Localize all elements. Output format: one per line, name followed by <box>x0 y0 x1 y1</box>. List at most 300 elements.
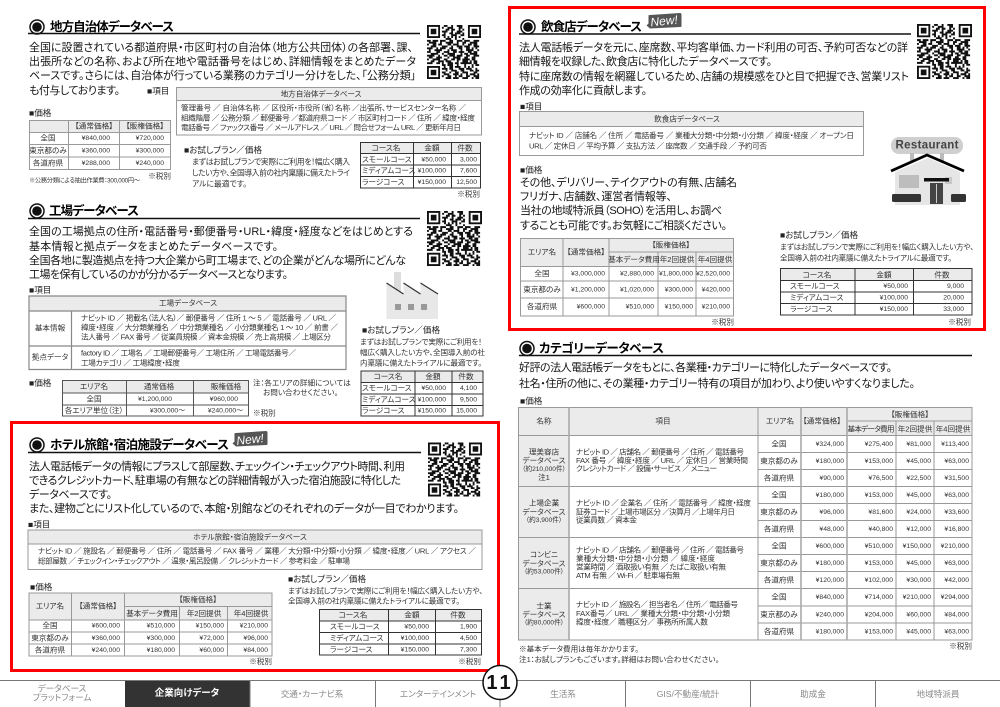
row: 上場企業: ¥45,000 <box>906 492 931 498</box>
tab labels: GIS/不動産/統計 <box>657 688 720 699</box>
price table: ¥360,000 <box>82 147 110 154</box>
price table: 【通常価格】 <box>567 246 605 256</box>
table header <box>536 409 971 434</box>
row: 理美容店: FAX 番号 ／ 緯度・経度 ／ URL ／ 定休日 ／ 営業時間 <box>576 455 748 465</box>
items table: 組織階層 ／ 公務分類 ／ 郵便番号 ／都道府県コード ／ 市区町村コード ／ 住所 ／ 緯度・経度 <box>181 112 475 122</box>
tax note: ※税別 <box>711 316 734 326</box>
course table: ¥50,000 <box>883 282 908 290</box>
panel: 地方自治体データベース <box>28 19 482 198</box>
additional info text <box>520 175 737 232</box>
extraction fee note: ※公務分類による抽出作業費：300,000円～ <box>29 176 140 184</box>
description text: 法人電話帳データを元に、座席数、平均客単価、カード利用の可否、予約可否などの詳 <box>519 40 908 54</box>
price table: 通常価格 <box>144 381 175 391</box>
course table: 件数 <box>458 371 474 381</box>
course table: コース名 <box>803 270 831 280</box>
tab labels: プラットフォーム <box>33 692 92 702</box>
row: 上場企業: ¥81,600 <box>868 508 893 516</box>
items table: 工場データベース <box>159 298 217 308</box>
description text: 特に座席数の情報を網羅しているため、店舗の規模感をひと目で把握でき、営業リスト <box>519 69 909 83</box>
price table: ¥210,000 <box>702 303 730 310</box>
items label: ■項目 <box>29 285 51 295</box>
course table: 20,000 <box>943 294 964 301</box>
row: 士業: 緯度・経度／ 職種区分／ 事務所所属人数 <box>576 616 708 626</box>
row: コンビニ: ¥210,000 <box>941 542 969 550</box>
description text: 法人電話帳データの情報にプラスして部屋数、チェックイン・チェックアウト時間、利用 <box>29 459 405 473</box>
icon: restaurant: Restaurant <box>896 140 959 152</box>
description text: 社名・住所の他に、その業種・カテゴリー特有の項目が加わり、より使いやすくなりました。 <box>519 376 915 390</box>
table header: 【販権価格】 <box>891 409 929 419</box>
area note: お問い合わせください。 <box>263 387 338 397</box>
price table: 【販権価格】 <box>126 120 164 130</box>
tab labels: 地域特派員 <box>917 688 960 699</box>
row: 士業: 全国 <box>771 592 787 602</box>
price table: ¥420,000 <box>702 286 730 293</box>
items table <box>520 112 864 156</box>
price table: ¥510,000 <box>147 622 175 629</box>
course table: 件数 <box>934 270 950 280</box>
price table: 販権価格 <box>211 381 242 391</box>
price table: ¥2,880,000 <box>620 270 654 277</box>
trial plan text: 全国導入前の社内稟議に備えたトライアルに最適です。 <box>780 252 952 262</box>
course table: ¥100,000 <box>418 396 446 403</box>
table header: 基本データ費用 <box>848 424 894 434</box>
row: 上場企業: ¥153,000 <box>865 492 893 498</box>
row: 士業: ¥180,000 <box>816 628 844 635</box>
heading: 飲食店 <box>519 19 911 34</box>
panel: ホテル旅館・宿泊施設データベース (highlighted) <box>12 422 498 670</box>
items table: ナビット ID ／ 店舗名 ／ 住所 ／ 電話番号 ／ 業種大分類・中分類・小分類 ／ 緯度・経度 ／ オープン日 <box>529 130 854 140</box>
table header: 年2回提供 <box>898 424 933 434</box>
price table: ¥600,000 <box>92 622 120 629</box>
description text: 細情報を収録した、飲食店に特化したデータベースです。 <box>519 54 772 68</box>
price table: エリア名 <box>36 600 64 610</box>
course table <box>780 268 972 315</box>
trial plan text: したい方や、全国導入前の社内稟議に備えたトライ <box>192 168 350 178</box>
tab labels: 助成金 <box>800 688 826 699</box>
course table: 7,600 <box>460 167 477 174</box>
price table: ¥3,000,000 <box>571 270 605 277</box>
course table: コース名 <box>374 371 402 381</box>
price table: ¥2,520,000 <box>696 270 730 277</box>
table header: 【通常価格】 <box>803 416 841 426</box>
row: 理美容店: ¥113,400 <box>941 440 969 448</box>
price table: ¥600,000 <box>577 303 605 310</box>
heading: 地方自治体 <box>28 19 420 34</box>
row: 理美容店: 東京都のみ <box>760 456 798 466</box>
row: 士業: ¥153,000 <box>865 628 893 635</box>
row: コンビニ: ¥510,000 <box>865 542 893 550</box>
price table: 全国 <box>534 268 550 278</box>
description text: も付与しております。 <box>29 84 120 97</box>
price table <box>29 593 272 656</box>
description text: 全国各地に製造拠点を持つ大企業から町工場まで、どの企業がどんな場所にどんな <box>29 253 406 267</box>
row: 士業: ¥240,000 <box>816 611 844 618</box>
table header: 年4回提供 <box>936 424 971 434</box>
course table: 3,000 <box>460 156 477 163</box>
price table <box>520 238 734 316</box>
price table: 全国 <box>40 132 56 142</box>
additional info text: することも可能です。お気軽にご相談ください。 <box>520 218 727 232</box>
items table: 管理番号 ／ 自治体名称 ／ 区役所・市役所（省）名称 ／出張所、サービスセンター名称 ／ <box>181 102 466 112</box>
tab labels: エンターテインメント <box>400 689 476 699</box>
price table: ¥1,020,000 <box>620 286 654 293</box>
price table: 年2回提供 <box>660 254 695 264</box>
area note: 注：各エリアの詳細については <box>253 378 351 388</box>
additional info text: 当社の地域特派員（SOHO）を活用し、お調べ <box>520 203 722 217</box>
row: 理美容店: ¥76,500 <box>868 474 893 482</box>
row: コンビニ: 業種大分類・中分類・小分類 ／ 緯度・経度 <box>576 553 715 563</box>
tax note: ※税別 <box>457 188 480 198</box>
price table: エリア名 <box>80 381 108 391</box>
course table: ミディアムコース <box>790 292 844 302</box>
row: 士業: ¥60,000 <box>906 611 931 618</box>
course table: ラージコース <box>330 645 372 654</box>
row: 上場企業: ¥33,600 <box>944 508 969 516</box>
price table: ¥210,000 <box>240 622 268 629</box>
additional info text: その他、デリバリー、テイクアウトの有無、店舗名 <box>520 175 737 189</box>
price table: 東京都のみ <box>523 284 561 294</box>
price table: ¥180,000 <box>147 646 175 654</box>
trial plan text: ■お試しプラン／価格 <box>362 324 440 335</box>
course table: ラージコース <box>362 178 404 186</box>
price table: ¥96,000 <box>243 634 268 642</box>
price table: エリア名 <box>528 246 556 256</box>
heading: カテゴリー <box>519 340 972 356</box>
tax note: ※税別 <box>949 640 972 650</box>
panel: カテゴリーデータベース <box>518 340 972 664</box>
items table: 法人番号 ／ FAX 番号 ／ 従業員規模 ／ 資本金規模 ／ 売上高規模 ／ 上場区分 <box>81 332 331 342</box>
course table <box>360 142 480 188</box>
tab labels: データベース <box>37 682 86 694</box>
items table: 地方自治体データベース <box>281 88 361 98</box>
course table: 12,500 <box>456 178 477 186</box>
trial plan text: 内稟議に備えたトライアルに最適です。 <box>360 358 482 368</box>
QR code <box>427 25 481 79</box>
QR code <box>917 24 972 79</box>
price table: 各道府県 <box>527 301 558 311</box>
course table: 1,900 <box>460 623 477 630</box>
row: 士業: ¥210,000 <box>903 594 931 600</box>
row: 理美容店: ¥45,000 <box>906 458 931 464</box>
row: コンビニ: ¥102,000 <box>865 576 893 584</box>
row: 上場企業: （約3,900件） <box>526 515 562 524</box>
course table: ¥100,000 <box>418 167 446 174</box>
course table: コース名 <box>372 142 400 152</box>
tab labels: 交通・カーナビ系 <box>281 689 344 699</box>
price table: ¥510,000 <box>626 303 654 310</box>
items table: 基本情報 <box>35 322 66 332</box>
red frame <box>12 422 498 670</box>
description text <box>29 459 459 515</box>
row: 理美容店: ¥324,000 <box>816 440 844 448</box>
heading: 飲食店: 飲食店データベース <box>541 19 642 34</box>
trial plan text <box>360 324 485 368</box>
course table: 件数 <box>457 142 473 152</box>
row: コンビニ: （約53,000件） <box>524 566 564 576</box>
row: 理美容店: ¥63,000 <box>944 458 969 464</box>
row: 理美容店: ¥31,500 <box>944 474 969 482</box>
course table: 金額 <box>404 610 420 620</box>
row: 上場企業: ¥40,800 <box>868 526 893 532</box>
heading: 地方自治体: 地方自治体データベース <box>50 19 174 34</box>
row: コンビニ: ナビット ID ／ 店舗名 ／ 郵便番号 ／ 住所 ／ 電話番号 <box>576 544 744 554</box>
price table: ¥84,000 <box>243 646 268 654</box>
trial plan text <box>288 573 483 606</box>
course table: スモールコース <box>330 622 380 631</box>
course table: ¥100,000 <box>880 294 908 301</box>
trial plan text: アルに最適です。 <box>192 178 247 188</box>
badge: New!: New! <box>650 13 679 29</box>
tax note: ※税別 <box>948 316 971 326</box>
course table: ミディアムコース <box>362 394 416 404</box>
price table: 全国 <box>86 394 102 404</box>
tax note: ※税別 <box>458 656 481 666</box>
price table: 各エリア単位（注） <box>65 405 123 415</box>
icon: factory <box>386 272 438 319</box>
area note <box>253 378 351 397</box>
row: 理美容店: ¥180,000 <box>816 458 844 464</box>
price label: ■価格 <box>520 395 543 406</box>
row: 士業: ¥45,000 <box>906 628 931 635</box>
row: 上場企業 <box>522 490 969 534</box>
row: 士業 <box>522 592 969 636</box>
items table <box>28 530 482 570</box>
course table: ミディアムコース <box>362 165 416 175</box>
heading: カテゴリー: カテゴリーデータベース <box>539 340 664 356</box>
price table: 東京都のみ <box>31 632 69 642</box>
active tab <box>125 680 250 707</box>
items label: ■項目 <box>28 520 50 530</box>
row: 士業: 東京都のみ <box>760 609 798 619</box>
panel: 飲食店データベース (highlighted) <box>510 8 984 330</box>
row: コンビニ: 各道府県 <box>764 574 795 584</box>
description text: 作成の効率化に貢献します。 <box>519 84 647 97</box>
footnotes: 注1：お試しプランもございます。詳細はお問い合わせください。 <box>519 654 719 664</box>
course table: 4,500 <box>460 634 477 642</box>
items table: 緯度・経度 ／ 大分類業種名 ／ 中分類業種名 ／ 小分類業種名 1 ～ 10 ／ 前書 ／ <box>81 322 338 332</box>
items table: ホテル旅館・宿泊施設データベース <box>193 532 307 542</box>
trial plan text: 幅広く購入したい方や、全国導入前の社 <box>360 347 485 357</box>
course table: ¥150,000 <box>401 646 429 653</box>
row: コンビニ: ¥45,000 <box>906 560 931 566</box>
row: コンビニ: 東京都のみ <box>760 558 798 568</box>
footnotes <box>519 644 719 664</box>
course table: 7,300 <box>460 646 477 653</box>
row: コンビニ <box>522 540 969 584</box>
tax note: ※税別 <box>249 656 272 666</box>
row: 士業: ¥840,000 <box>816 594 844 600</box>
price table: 【販権価格】 <box>179 594 217 604</box>
course table: スモールコース <box>362 155 412 164</box>
row: 上場企業: ¥180,000 <box>816 492 844 498</box>
row: コンビニ: ¥30,000 <box>906 576 931 584</box>
row: 士業: ナビット ID ／ 施設名／ 担当者名／ 住所／ 電話番号 <box>576 599 738 609</box>
row: 理美容店: データベース <box>522 455 565 465</box>
row: 士業: ¥204,000 <box>865 611 893 618</box>
trial plan text <box>184 144 350 188</box>
items table: 総部屋数 ／ チェックイン・チェックアウト ／ 温泉・風呂設備 ／ クレジットカード ／ 参考料金 ／ 駐車場 <box>38 556 350 566</box>
row: 士業: FAX番号／ URL ／ 業種大分類・中分類・小分類 <box>576 608 730 618</box>
row: 上場企業: ¥16,800 <box>944 526 969 532</box>
course table: 9,000 <box>947 282 964 290</box>
heading: 工場: 工場データベース <box>49 203 139 218</box>
price table: ¥300,000～ <box>150 407 185 414</box>
page number: 11 <box>486 672 514 694</box>
description text: データベースです。 <box>29 487 112 501</box>
items table: factory ID ／ 工場名 ／ 工場郵便番号／ 工場住所 ／ 工場電話番号／ <box>81 348 296 358</box>
price label: ■価格 <box>29 377 52 388</box>
course table: 件数 <box>450 610 466 620</box>
row: 上場企業: ナビット ID ／ 企業名 ／ 住所 ／ 電話番号 ／ 緯度・経度 <box>576 498 751 508</box>
price table: ¥1,800,000 <box>659 270 693 277</box>
price table: ¥300,000 <box>147 634 175 642</box>
course table: 金額 <box>424 142 440 152</box>
course table: 9,500 <box>460 396 477 403</box>
row: コンビニ: ¥120,000 <box>816 576 844 584</box>
row: コンビニ: コンビニ <box>530 550 558 559</box>
course table <box>361 371 483 416</box>
course table: ¥50,000 <box>404 623 429 630</box>
row: 上場企業: 全国 <box>771 490 787 500</box>
row: 理美容店: クレジットカード ／ 設備・サービス ／ メニュー <box>576 463 717 473</box>
price table: ¥60,000 <box>199 646 224 654</box>
price table: 【通常価格】 <box>79 600 117 610</box>
description text: できるクレジットカード、駐車場の有無などの詳細情報が入った宿泊施設に特化した <box>29 473 401 487</box>
heading: ホテル旅館: ホテル旅館・宿泊施設データベース <box>50 437 229 452</box>
course table: ミディアムコース <box>330 632 384 642</box>
course table: ラージコース <box>362 406 404 415</box>
description text <box>519 360 915 390</box>
row: 理美容店: ¥22,500 <box>906 474 931 482</box>
course table: 4,100 <box>460 384 477 392</box>
price table: ¥960,000 <box>210 396 238 402</box>
description text: 工場を保有しているのかが分かるデータベースとなります。 <box>29 267 288 281</box>
price table: ¥72,000 <box>199 634 224 642</box>
description text: 全国に設置されている都道府県・市区町村の自治体（地方公共団体）の各部署、課、 <box>29 40 413 54</box>
row: 上場企業: 上場企業 <box>529 498 560 508</box>
row: 理美容店: 理美容店 <box>529 446 560 456</box>
items table: 飲食店データベース <box>654 114 720 124</box>
course table: ¥50,000 <box>421 156 446 163</box>
course table: コース名 <box>339 610 367 620</box>
price table: ¥840,000 <box>82 134 110 142</box>
row: 理美容店: ¥81,000 <box>906 440 931 448</box>
trial plan text <box>780 229 974 262</box>
price table: 基本データ費用 <box>126 608 178 618</box>
heading: 工場 <box>28 203 420 218</box>
description text: 出張所などの名称、および所在地や電話番号をはじめ、詳細情報をまとめたデータ <box>29 54 416 68</box>
row: 士業: ¥714,000 <box>865 594 893 600</box>
price table: 東京都のみ <box>29 145 67 155</box>
items table: 電話番号 ／ ファックス番号 ／ メールアドレス ／ URL ／ 問合せフォーム URL ／ 更新年月日 <box>181 122 461 132</box>
price table: ¥150,000 <box>665 303 693 310</box>
row: コンビニ: 全国 <box>771 540 787 550</box>
price table: ¥288,000 <box>82 160 110 166</box>
items table: 拠点データ <box>32 352 68 362</box>
row: 士業: データベース <box>522 609 565 619</box>
description text: ベースです。さらには、自治体が行っている業務のカテゴリー分けをした、「公務分類」 <box>29 68 416 82</box>
row: 上場企業: データベース <box>522 506 565 516</box>
additional info text: フリガナ、店舗数、運営者情報等、 <box>520 189 672 203</box>
description text: また、建物ごとにリスト化しているので、本館・別館などのそれぞれのデータが一目でわかります。 <box>29 501 459 515</box>
row: 上場企業: ¥12,000 <box>906 526 931 532</box>
course table: ラージコース <box>790 304 832 314</box>
trial plan text: ■お試しプラン／価格 <box>288 573 366 584</box>
row: 理美容店: （約210,000件） <box>522 464 566 473</box>
trial plan text: まずはお試しプランで実際にご利用を！幅広く購入 <box>192 156 350 166</box>
row: 上場企業: 各道府県 <box>764 524 795 534</box>
price table <box>29 120 170 170</box>
row: 士業: ¥294,000 <box>941 594 969 600</box>
row: 上場企業: 東京都のみ <box>760 506 798 516</box>
price table: ¥1,200,000 <box>571 286 605 293</box>
row: 理美容店: 注1 <box>538 472 550 482</box>
row: 理美容店: 各道府県 <box>764 472 795 482</box>
items table <box>29 296 346 370</box>
price label: ■価格 <box>520 164 543 175</box>
category price table <box>518 408 972 640</box>
course table: 33,000 <box>943 306 964 312</box>
course table: スモールコース <box>790 282 840 290</box>
price table: ¥300,000 <box>665 286 693 293</box>
row: 理美容店: ¥153,000 <box>865 458 893 464</box>
course table: ¥150,000 <box>418 178 446 186</box>
page number <box>483 666 517 700</box>
items table: ナビット ID ／ 施設名 ／ 郵便番号 ／ 住所 ／ 電話番号 ／ FAX 番号 ／ 業種／ 大分類・中分類・小分類 ／ 緯度・経度／ URL ／ アクセス ／ <box>38 546 476 556</box>
row: コンビニ: ¥63,000 <box>944 560 969 566</box>
tax note: ※税別 <box>253 408 276 418</box>
heading: ホテル旅館 <box>28 437 421 452</box>
row: コンビニ: ¥600,000 <box>816 542 844 550</box>
trial plan text: ■お試しプラン／価格 <box>780 229 858 240</box>
row: コンビニ: ¥180,000 <box>816 560 844 566</box>
row: 上場企業: 従業員数 ／ 資本金 <box>576 514 637 524</box>
course table: 金額 <box>425 371 441 381</box>
table header: 名称 <box>536 416 552 426</box>
price label: ■価格 <box>29 107 52 118</box>
price table <box>62 380 248 416</box>
row: 理美容店: 全国 <box>771 438 787 448</box>
trial plan text: まずはお試しプランで実際にご利用を！幅広く購入したい方や、 <box>288 586 483 596</box>
price table: ¥300,000 <box>136 147 164 154</box>
panel: 工場データベース <box>28 203 485 418</box>
course table: ¥150,000 <box>418 407 446 414</box>
row: 理美容店: ¥275,400 <box>865 440 893 448</box>
tax note: ※税別 <box>148 170 171 180</box>
items table: URL ／ 定休日 ／ 平均予算 ／ 支払方法 ／ 座席数 ／ 交通手段 ／ 予約可否 <box>529 140 767 150</box>
row: 士業: 士業 <box>536 600 552 610</box>
price label: ■価格 <box>30 581 53 592</box>
items table: 工場カテゴリ ／ 工場緯度・経度 <box>81 358 180 368</box>
row: 上場企業: ¥48,000 <box>819 526 844 532</box>
course table: 金額 <box>876 270 892 280</box>
row: 上場企業: ¥63,000 <box>944 492 969 498</box>
description text: 好評の法人電話帳データをもとに、各業種・カテゴリーに特化したデータベースです。 <box>519 360 892 374</box>
price table: 全国 <box>42 620 58 630</box>
trial plan text: まずはお試しプランで実際にご利用を！ <box>360 336 482 346</box>
table header: 項目 <box>655 416 671 426</box>
row: 士業: ¥84,000 <box>944 611 969 618</box>
row: 士業: （約80,000件） <box>524 618 564 626</box>
course table: ¥150,000 <box>880 306 908 312</box>
price table: 年4回提供 <box>234 608 269 618</box>
description text: 基本情報と拠点データをまとめたデータベースです。 <box>29 239 278 253</box>
description text <box>29 40 416 97</box>
table header: エリア名 <box>766 416 794 426</box>
description text: 全国の工場拠点の住所・電話番号・郵便番号・URL・緯度・経度などをはじめとする <box>29 224 413 238</box>
row: コンビニ: ¥42,000 <box>944 576 969 584</box>
tab labels: 企業向けデータ <box>155 687 219 699</box>
